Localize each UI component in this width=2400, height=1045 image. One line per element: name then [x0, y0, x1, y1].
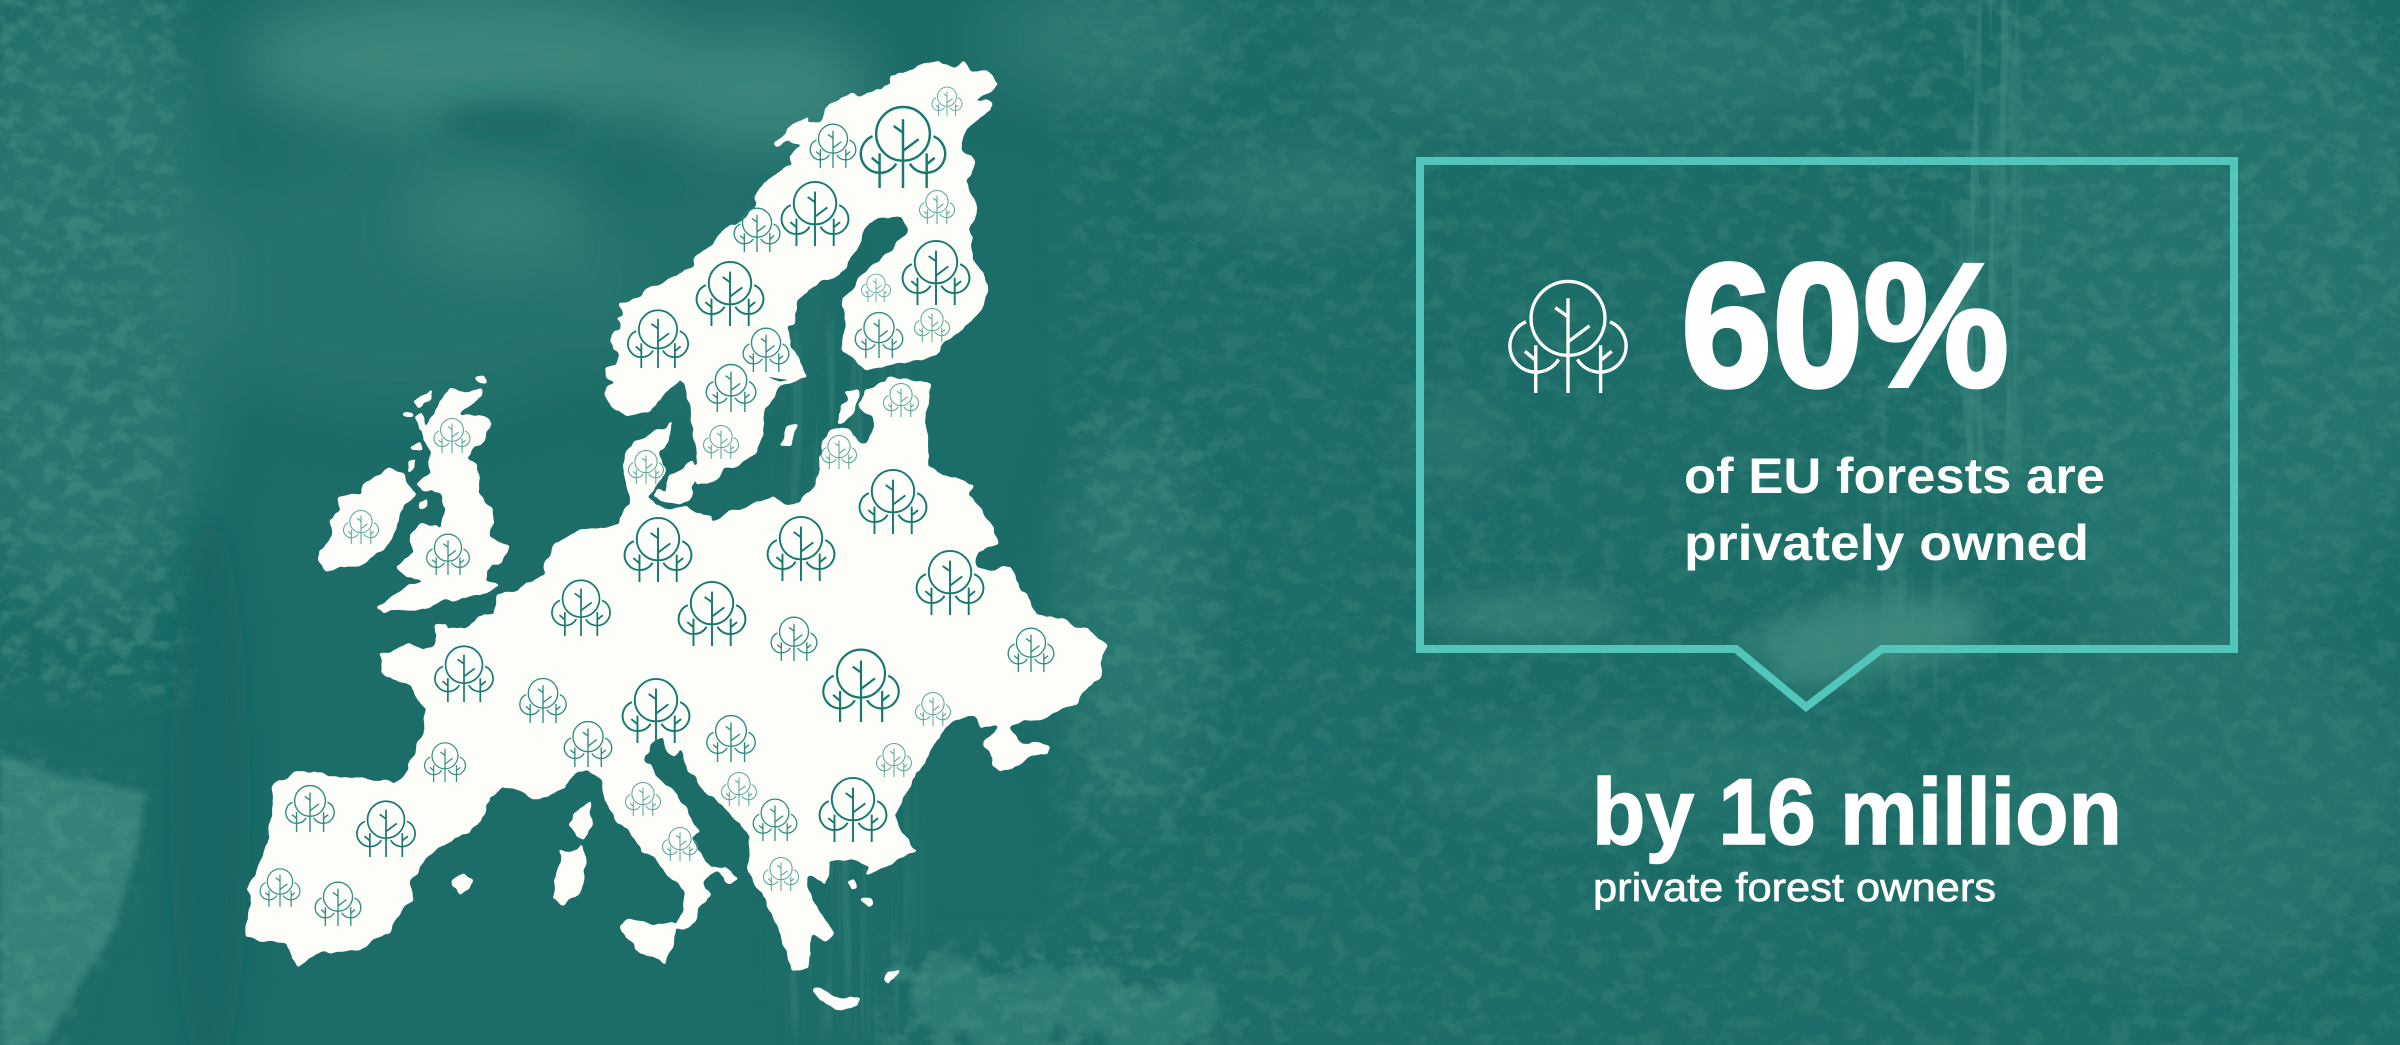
icon: white trees [1510, 281, 1626, 393]
icon: tree [520, 679, 566, 723]
icon: tree [679, 582, 745, 646]
icon: tree [903, 241, 969, 305]
icon: tree [855, 313, 903, 358]
icon: tree [707, 716, 755, 762]
icon: tree [706, 365, 756, 412]
text: private forest owners: private forest owners [1593, 866, 1996, 910]
icon: tree [764, 857, 798, 891]
icon: tree [861, 274, 891, 302]
text: of EU forests are privately owned: of EU forests are [1684, 448, 2105, 504]
icon: tree [625, 518, 691, 582]
icon: tree [932, 87, 962, 116]
icon: tree [315, 882, 361, 926]
icon: tree [344, 510, 378, 544]
icon: tree [629, 450, 663, 484]
icon: tree [810, 124, 856, 168]
icon: tree [915, 308, 949, 342]
stat: 60%: 60% [1681, 228, 2009, 424]
icon: tree [628, 310, 688, 368]
icon: tree [357, 801, 415, 857]
map: Britain and Ireland [318, 375, 510, 613]
icon: tree [734, 208, 780, 252]
icon: tree [722, 772, 756, 806]
icon: tree [884, 383, 918, 417]
icon: tree [623, 679, 689, 743]
icon: tree [564, 722, 612, 767]
icon: tree [823, 650, 899, 722]
text: of EU forests are privately owned: privately owned [1684, 515, 2089, 571]
icon: tree [552, 580, 610, 636]
icon: tree [753, 799, 797, 841]
map: lake in Sweden [768, 377, 788, 382]
icon: tree [920, 190, 954, 224]
icon: tree [771, 617, 817, 661]
icon: tree [861, 107, 945, 188]
stat: by 16 million: by 16 million [1592, 759, 2122, 864]
icon: tree [435, 646, 493, 702]
icon: tree [697, 262, 763, 326]
icon: tree [626, 782, 660, 816]
icon: tree [743, 328, 789, 372]
map: Scandinavia and Baltic region [600, 58, 998, 544]
icon: tree [425, 743, 465, 782]
icon: tree [916, 692, 950, 726]
icon: tree [704, 425, 738, 459]
icon: tree [286, 786, 334, 832]
icon: tree [860, 470, 926, 534]
icon: tree [427, 534, 469, 575]
icon: tree [877, 743, 911, 777]
icon: tree [782, 182, 848, 246]
icon: tree [820, 778, 886, 842]
icon: tree [260, 869, 300, 907]
icon: tree [768, 517, 834, 581]
map: western Europe, Iberia, Italy [245, 523, 737, 967]
icon: tree [917, 551, 983, 615]
callout: speech-bubble frame [1420, 161, 2234, 707]
map: eastern Europe, Balkans, Greece [677, 517, 1108, 1012]
icon: tree [663, 827, 697, 861]
icon: tree [822, 435, 856, 469]
icon: tree [1008, 628, 1054, 672]
map of Europe [245, 58, 1108, 1012]
text: of EU forests are privately owned [1684, 448, 2105, 571]
forest tree icons on the map [260, 87, 1054, 926]
icon: tree [434, 418, 470, 453]
